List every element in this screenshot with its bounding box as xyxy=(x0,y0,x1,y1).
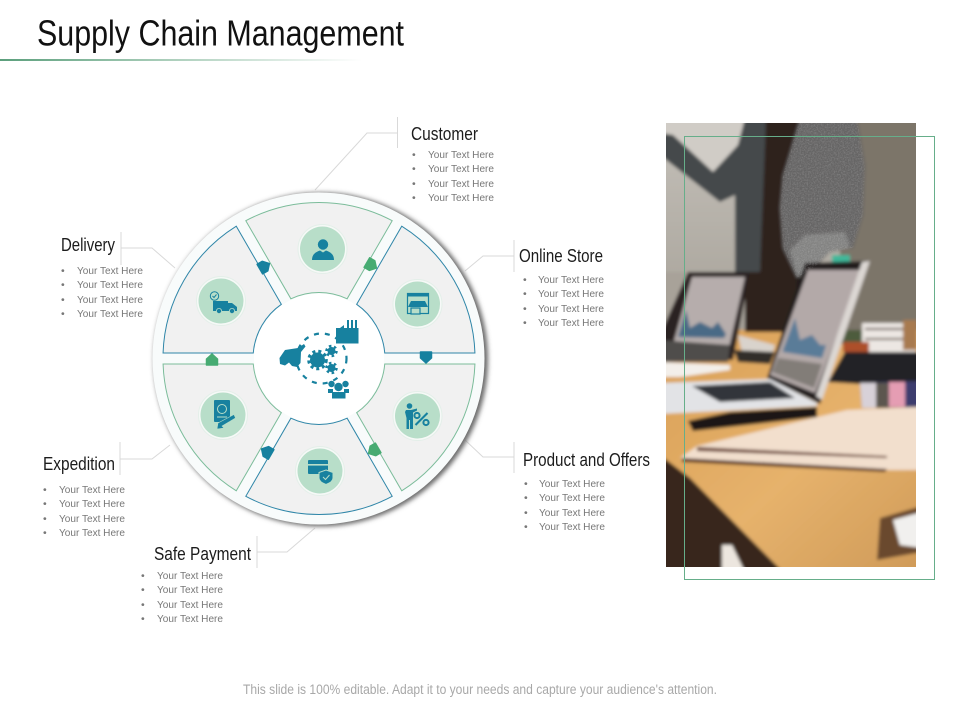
label: Customer: • xyxy=(412,178,416,190)
icon: online store xyxy=(393,280,442,328)
icon: delivery truck xyxy=(196,276,246,326)
label: Safe Payment: Your Text Here xyxy=(157,599,223,611)
segment: upper left (blue) xyxy=(147,217,304,392)
right laptop xyxy=(767,261,870,404)
label: Delivery: • xyxy=(61,279,65,291)
icon: secure card xyxy=(296,446,344,496)
label: Product and Offers: Product and Offers xyxy=(523,450,650,470)
label: Customer: Your Text Here xyxy=(428,192,494,204)
icon: supply chain center xyxy=(280,320,358,398)
notebook xyxy=(680,407,922,470)
label: Product and Offers: • xyxy=(524,521,528,533)
title: Supply Chain Management xyxy=(37,12,404,54)
label: Customer: • xyxy=(412,163,416,175)
label: Safe Payment xyxy=(141,528,315,625)
right side objects xyxy=(862,323,916,353)
footer note: This slide is 100% editable. Adapt it to your needs and capture your audience's attention. xyxy=(243,682,717,697)
mug xyxy=(877,506,922,560)
label: Delivery: • xyxy=(61,294,65,306)
label: Expedition xyxy=(43,442,170,539)
car xyxy=(280,344,306,367)
photo: business presentation with laptops xyxy=(660,118,922,572)
label: Product and Offers: • xyxy=(524,507,528,519)
label: Product and Offers: Your Text Here xyxy=(539,492,605,504)
label: Safe Payment: • xyxy=(141,613,145,625)
circular diagram xyxy=(147,192,491,526)
label: Product and Offers: Your Text Here xyxy=(539,507,605,519)
label: Product and Offers: • xyxy=(524,478,528,490)
label: Delivery: • xyxy=(61,308,65,320)
label: Online Store: Your Text Here xyxy=(538,288,604,300)
person xyxy=(794,275,802,290)
label: Online Store: • xyxy=(523,274,527,286)
label: Online Store: Your Text Here xyxy=(538,274,604,286)
label: Online Store: Your Text Here xyxy=(538,303,604,315)
segment: lower right (green) xyxy=(334,325,491,500)
segment: lower left (green) xyxy=(147,325,304,500)
label: Expedition: • xyxy=(43,513,47,525)
label: Expedition: Your Text Here xyxy=(59,498,125,510)
gears xyxy=(310,352,325,368)
table xyxy=(660,330,922,572)
disc shadow xyxy=(154,192,488,526)
label: Expedition: • xyxy=(43,498,47,510)
label: Delivery: Delivery xyxy=(61,235,115,255)
label: Product and Offers: Your Text Here xyxy=(539,521,605,533)
label: Product and Offers: • xyxy=(524,492,528,504)
left laptop xyxy=(660,272,750,360)
connector pins xyxy=(206,258,432,459)
small papers xyxy=(738,335,775,355)
label: Expedition: • xyxy=(43,484,47,496)
label: Online Store: Your Text Here xyxy=(538,317,604,329)
label: Safe Payment: Your Text Here xyxy=(157,584,223,596)
photo frame xyxy=(684,136,934,580)
segment: bottom (blue) xyxy=(246,418,392,515)
label: Safe Payment: Your Text Here xyxy=(157,613,223,625)
label: Customer: Your Text Here xyxy=(428,163,494,175)
label: Expedition: • xyxy=(43,527,47,539)
label: Product and Offers: Your Text Here xyxy=(539,478,605,490)
table shadow bottom left xyxy=(666,457,781,567)
label: Online Store: Online Store xyxy=(519,246,603,266)
factory xyxy=(336,320,358,344)
label: Customer: Your Text Here xyxy=(428,149,494,161)
label: Expedition: Expedition xyxy=(43,454,115,474)
icon: percent offer xyxy=(393,392,442,440)
label: Safe Payment: • xyxy=(141,570,145,582)
people xyxy=(333,382,344,392)
label: Customer: Customer xyxy=(411,124,478,144)
title underline xyxy=(0,59,362,61)
label: Customer: • xyxy=(412,192,416,204)
label: Safe Payment: Safe Payment xyxy=(154,544,251,564)
label: Safe Payment: • xyxy=(141,599,145,611)
segment: top (green) xyxy=(246,202,392,299)
label: Online Store xyxy=(465,240,604,329)
label: Customer xyxy=(315,117,494,204)
label: Online Store: • xyxy=(523,317,527,329)
white disc xyxy=(152,192,484,524)
label: Expedition: Your Text Here xyxy=(59,484,125,496)
center hub xyxy=(254,294,384,424)
label: Safe Payment: • xyxy=(141,584,145,596)
icon: passport xyxy=(198,390,248,440)
label: Online Store: • xyxy=(523,303,527,315)
label: Expedition: Your Text Here xyxy=(59,527,125,539)
label: Customer: • xyxy=(412,149,416,161)
label: Safe Payment: Your Text Here xyxy=(157,570,223,582)
label: Delivery: Your Text Here xyxy=(77,294,143,306)
icon: customer person xyxy=(298,224,347,274)
label: Delivery: Your Text Here xyxy=(77,279,143,291)
segment: upper right (blue) xyxy=(334,217,491,392)
label: Expedition: Your Text Here xyxy=(59,513,125,525)
label: Online Store: • xyxy=(523,288,527,300)
label: Delivery: Your Text Here xyxy=(77,308,143,320)
label: Product and Offers xyxy=(465,440,650,533)
label: Customer: Your Text Here xyxy=(428,178,494,190)
label: Delivery xyxy=(61,232,175,320)
tweed texture xyxy=(780,118,865,278)
label: Delivery: Your Text Here xyxy=(77,265,143,277)
label: Delivery: • xyxy=(61,265,65,277)
